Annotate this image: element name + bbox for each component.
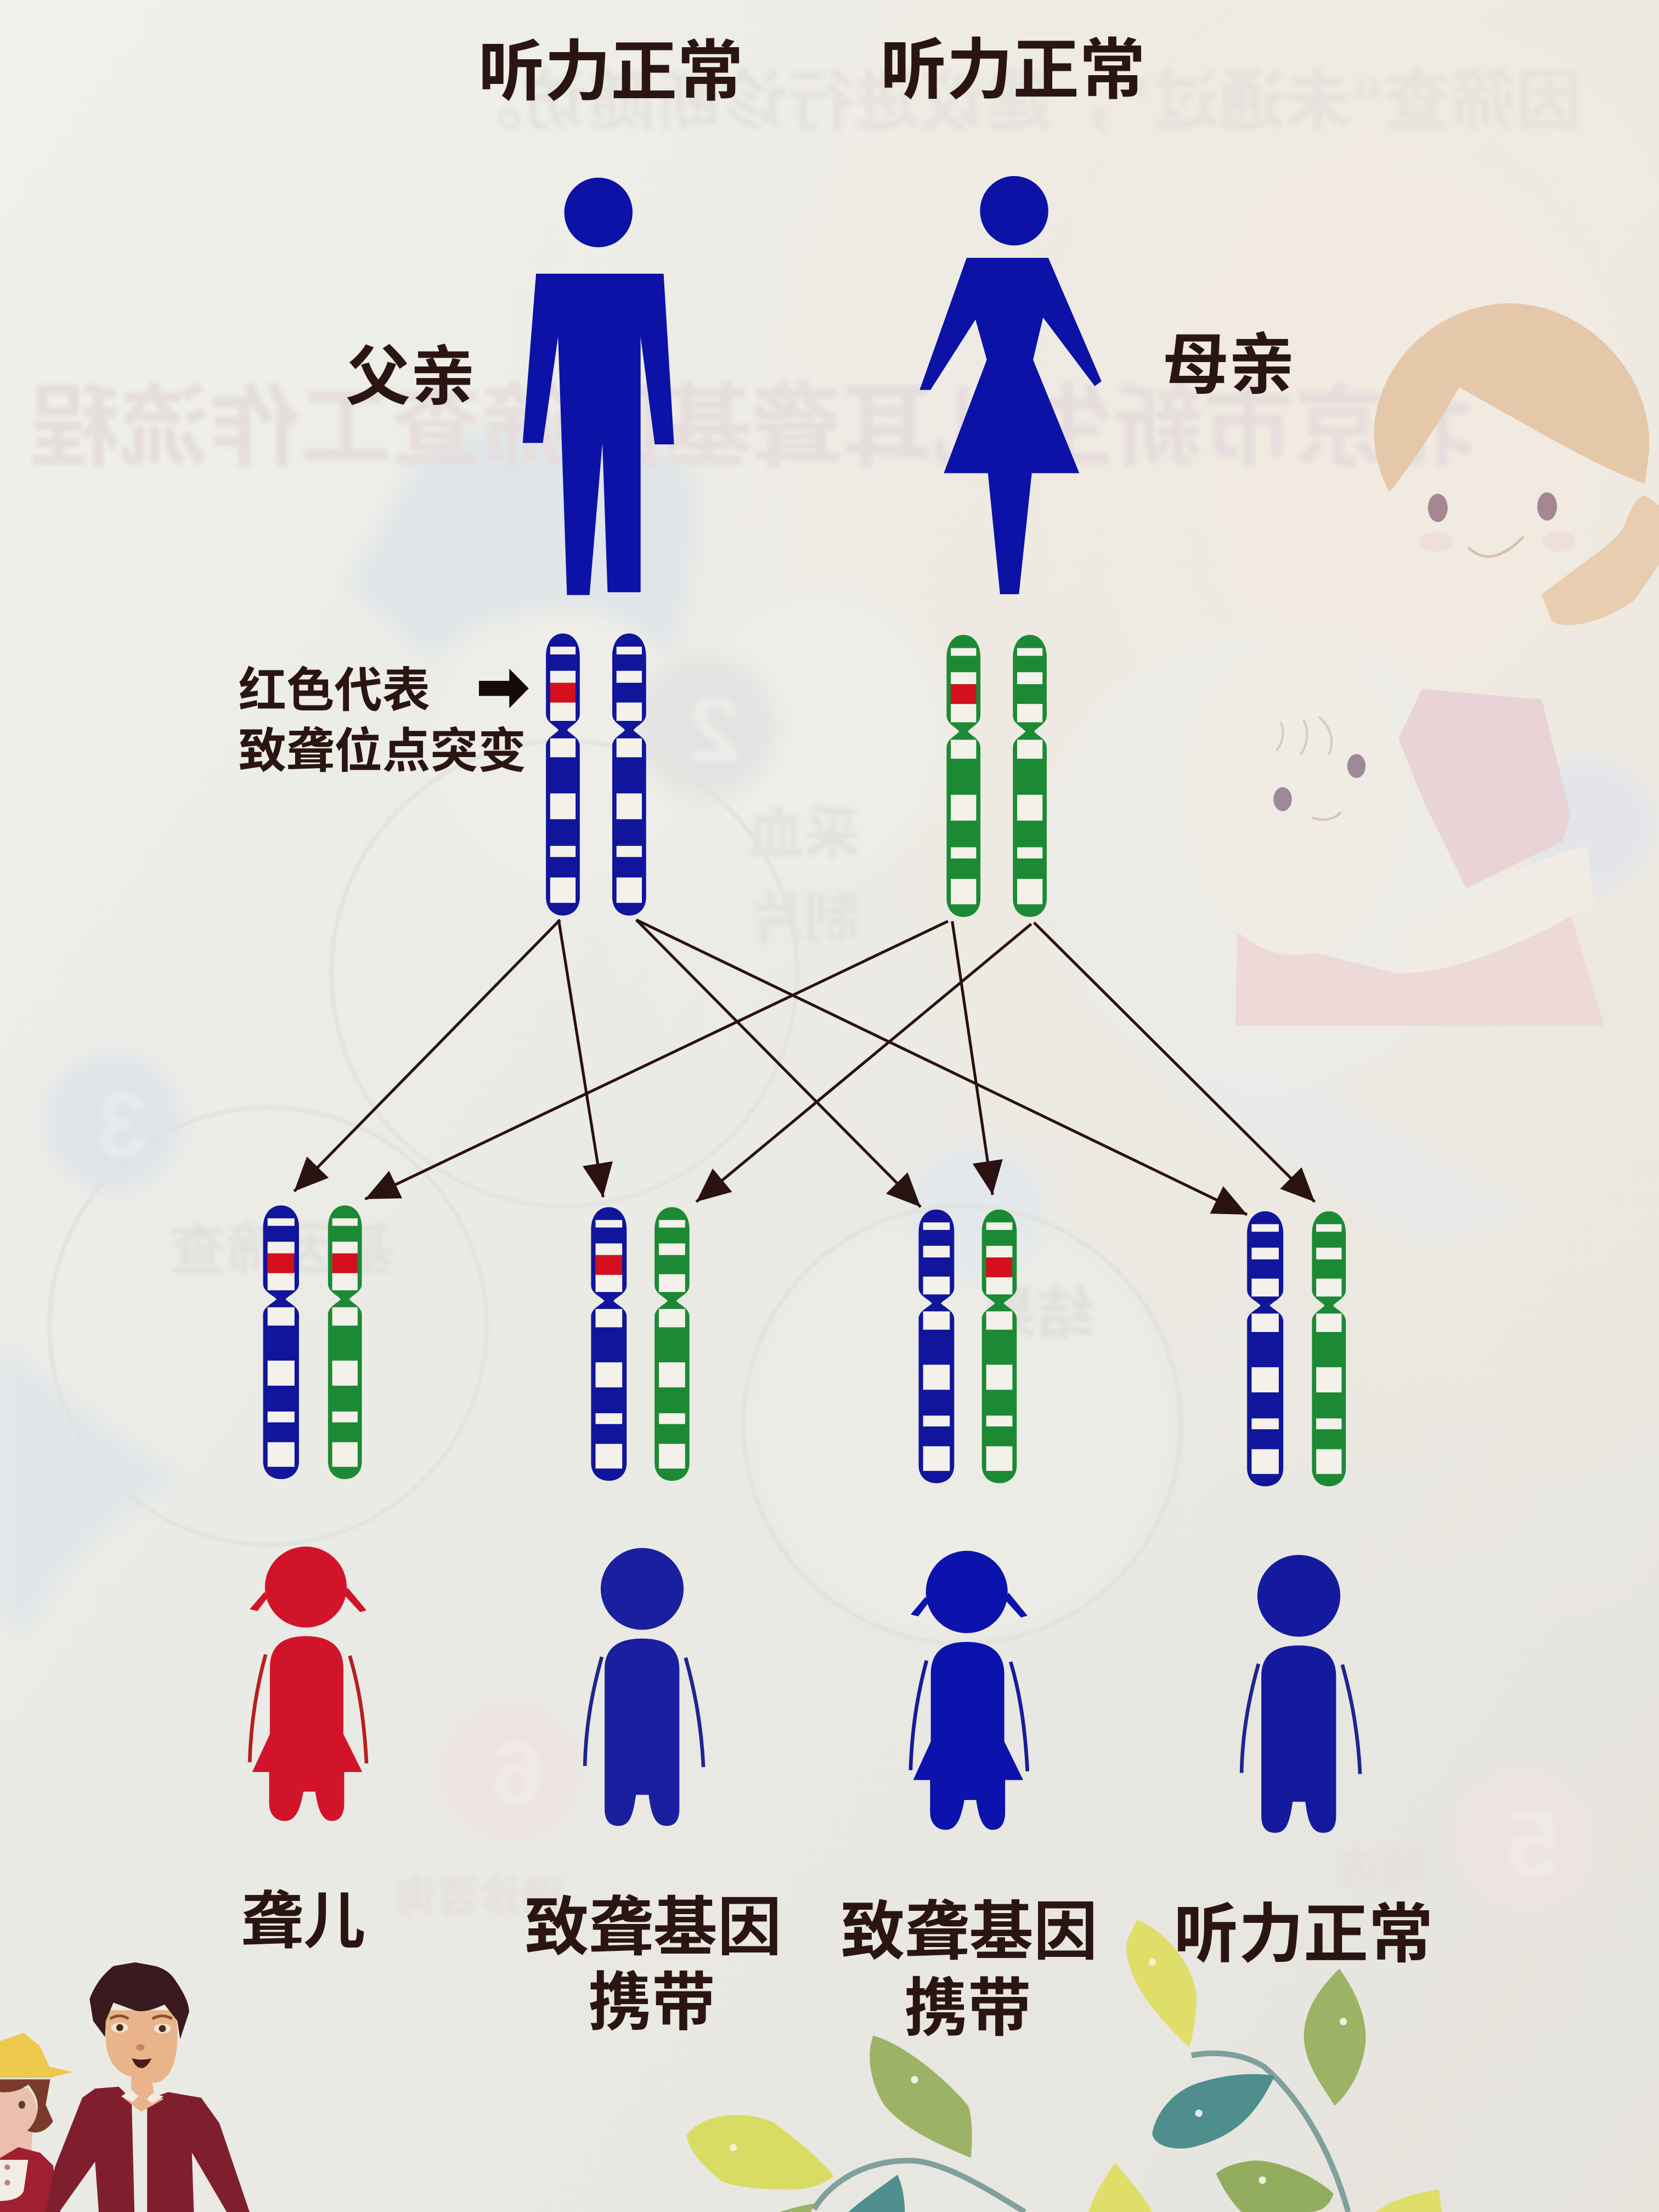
icon: callout arrow bbox=[479, 669, 529, 708]
arrow: father to child 3 bbox=[636, 920, 921, 1207]
arrow: father to child 2 bbox=[558, 920, 603, 1197]
label: hearing normal child: 听力正常 bbox=[1173, 1899, 1433, 1971]
icon: child 3 carrier girl bbox=[911, 1551, 1028, 1830]
child 1 chromosomes bbox=[263, 1205, 362, 1479]
father chromosomes with mutation bbox=[546, 634, 646, 916]
show-through: mirrored pale printing from the reverse page: 因筛查“未通过”，建议进行诊断随访。 bbox=[456, 64, 1583, 138]
show-through: mirrored pale printing from the reverse page: 结果 bbox=[980, 1282, 1093, 1345]
icon: child 2 carrier boy bbox=[585, 1548, 703, 1826]
label: carrier child 3 bbox=[841, 1895, 1098, 2044]
label: carrier child 3: 致聋基因 bbox=[841, 1895, 1098, 1967]
arrow: mother to child 1 bbox=[365, 921, 948, 1199]
child 3 chromosomes bbox=[919, 1210, 1017, 1483]
arrow: mother to child 3 bbox=[952, 921, 992, 1195]
callout: red marks the deafness mutation: 致聋位点突变 bbox=[239, 724, 526, 778]
label: carrier child 2 bbox=[525, 1892, 782, 2038]
decoration: green leaves and stems bbox=[687, 1920, 1442, 2212]
illustration: man in red jacket at bottom left bbox=[45, 1962, 250, 2212]
show-through: mirrored pale printing from the reverse page: 3 bbox=[97, 1073, 148, 1177]
arrow: mother to child 2 bbox=[696, 924, 1031, 1202]
mother chromosomes with mutation bbox=[946, 635, 1047, 917]
icon: mother figure bbox=[919, 176, 1102, 594]
show-through: mirrored pale printing from the reverse page: 5 bbox=[1507, 1792, 1559, 1896]
label: father: 父亲 bbox=[346, 341, 476, 414]
label: mother: 母亲 bbox=[1163, 328, 1295, 402]
callout: red marks the deafness mutation bbox=[239, 663, 526, 778]
show-through: mirrored pale printing from the reverse page: 制片 bbox=[748, 887, 861, 950]
show-through: mirrored pale printing from the reverse page: 2 bbox=[689, 678, 741, 782]
show-through: mirrored pale printing from the reverse page: 基因筛查 bbox=[170, 1218, 395, 1282]
heading: father hearing normal: 听力正常 bbox=[478, 35, 743, 109]
label: deaf child: 聋儿 bbox=[241, 1887, 365, 1956]
arrow: mother to child 4 bbox=[1034, 923, 1315, 1202]
show-through: mirrored pale printing from the reverse page: 随访 bbox=[1340, 1846, 1425, 1893]
show-through: mirrored pale printing from the reverse page: 北京市新生儿耳聋基因筛查工作流程 bbox=[30, 377, 1474, 478]
callout: red marks the deafness mutation: 红色代表 bbox=[239, 663, 430, 717]
show-through: mirrored pale printing from the reverse page: 采血 bbox=[748, 803, 861, 866]
label: carrier child 2: 致聋基因 bbox=[525, 1892, 782, 1963]
icon: father figure bbox=[523, 178, 674, 595]
illustration: girl in yellow hat at bottom left bbox=[0, 2033, 73, 2212]
faded illustration: mother holding baby bbox=[1185, 303, 1659, 1026]
arrow: father to child 4 bbox=[636, 920, 1247, 1215]
icon: child 4 hearing normal boy bbox=[1242, 1555, 1360, 1833]
icon: child 1 deaf girl bbox=[250, 1547, 366, 1821]
child 4 chromosomes bbox=[1247, 1211, 1346, 1486]
child 2 chromosomes bbox=[591, 1207, 690, 1481]
label: carrier child 3: 携带 bbox=[904, 1972, 1031, 2044]
show-through: mirrored pale printing from the reverse page: 确诊咨询 bbox=[395, 1874, 565, 1921]
label: carrier child 2: 携带 bbox=[588, 1967, 715, 2038]
arrow: father to child 1 bbox=[294, 920, 560, 1192]
inheritance arrows bbox=[294, 920, 1315, 1215]
heading: mother hearing normal: 听力正常 bbox=[881, 33, 1146, 108]
show-through: mirrored pale printing from the reverse page: 6 bbox=[492, 1721, 543, 1825]
